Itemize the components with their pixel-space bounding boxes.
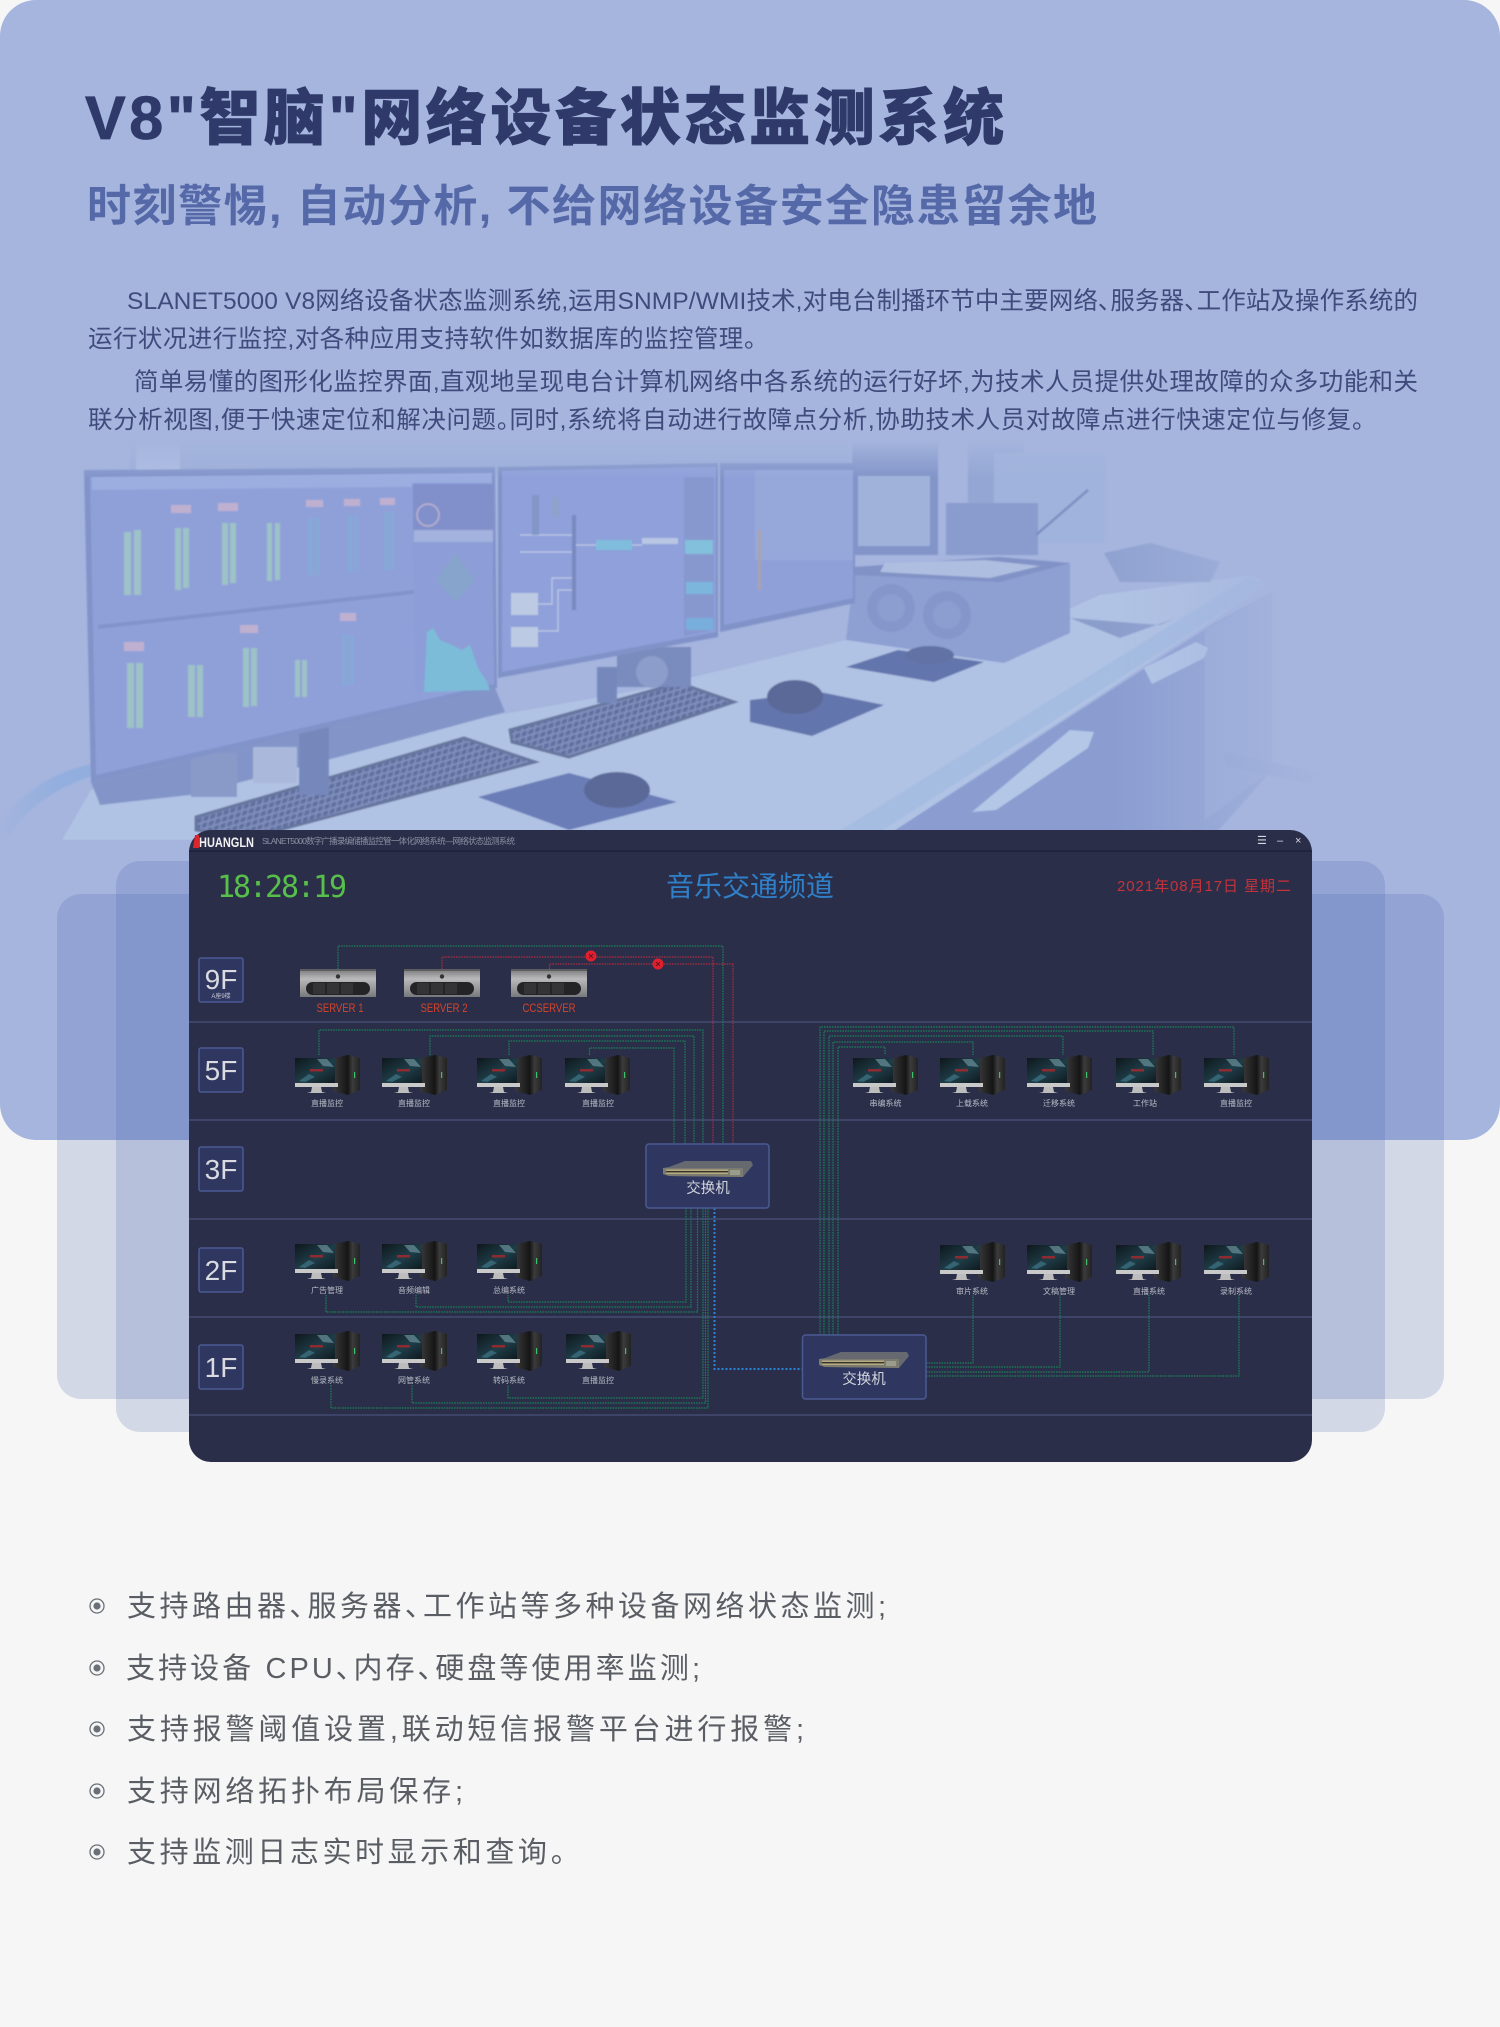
floor label 1F (199, 1345, 243, 1389)
floor label 5F (199, 1048, 243, 1092)
workstations 1F (295, 1331, 631, 1385)
floor label 9F (199, 958, 243, 1002)
window title bar: ☰ (1257, 835, 1267, 847)
window background (189, 830, 1312, 1462)
blue curved desk edge (24, 764, 91, 812)
mouse pads and mice (478, 618, 1176, 830)
workstations 5F right: 迁移系统 (1043, 1098, 1075, 1108)
floor label 2F (199, 1248, 243, 1292)
list item 2: 支持设备 CPU、内存、硬盘等使用率监测; (126, 1652, 700, 1685)
date: 2021年08月17日 星期二 (1117, 878, 1291, 895)
list item 3: 支持报警阈值设置,联动短信报警平台进行报警; (127, 1713, 804, 1746)
workstations 5F left: 直播监控 (398, 1098, 430, 1108)
workstations 2F left: 音频编辑 (398, 1285, 430, 1295)
floor label 9F: 9F (205, 964, 237, 995)
floor label 9F: A座9楼 (211, 992, 231, 1000)
workstations 5F right: 工作站 (1133, 1098, 1157, 1108)
subtitle: 时刻警惕, 自动分析, 不给网络设备安全隐患留余地 (87, 182, 1097, 231)
workstations 1F: 慢录系统 (311, 1375, 343, 1385)
background photo: control room desk with monitors (24, 448, 1259, 840)
list item 5: 支持监测日志实时显示和查询。 (127, 1836, 565, 1869)
back layer: inner translucent plate (116, 861, 1385, 1432)
intro text block (88, 287, 1418, 434)
rear monitors and microphone (852, 440, 1220, 582)
monitor 3 (720, 463, 855, 632)
server: CCSERVER (511, 969, 587, 1015)
monitor 2 (498, 463, 718, 678)
workstations 2F right: 审片系统 (956, 1286, 988, 1296)
intro text block: 简单易懂的图形化监控界面,直观地呈现电台计算机网络中各系统的运行好坏,为技术人员提供处理故障的众多功能和关 (134, 368, 1418, 396)
intro text block: 运行状况进行监控,对各种应用支持软件如数据库的监控管理。 (88, 325, 756, 353)
alarm marker: ccserver link (652, 958, 664, 970)
workstations 5F right: 直播监控 (1220, 1098, 1252, 1108)
switch on 1F: 交换机 (842, 1370, 886, 1388)
speaker, cans and monitor stands (191, 647, 691, 797)
list item 4: 支持网络拓扑布局保存; (127, 1775, 463, 1808)
alarm marker: server 2 link (586, 950, 596, 962)
server: SERVER 2 (404, 969, 480, 1015)
switch on 1F (802, 1335, 926, 1399)
workstations 2F right: 录制系统 (1220, 1286, 1252, 1296)
floor label 5F: 5F (205, 1055, 237, 1086)
keyboards (196, 683, 734, 838)
workstations 2F left (295, 1241, 542, 1295)
wall and window behind monitors (968, 458, 994, 503)
dark area below monitor 1 (91, 688, 505, 805)
workstations 1F: 网管系统 (398, 1375, 430, 1385)
server: SERVER 1: SERVER 1 (316, 1001, 364, 1015)
window title bar (189, 834, 1312, 851)
workstations 5F left (295, 1055, 630, 1108)
floor label 3F: 3F (205, 1154, 237, 1185)
cabinet under desk (844, 614, 1259, 830)
floor label 3F (199, 1147, 243, 1191)
panel: network monitoring software window (189, 830, 1312, 1462)
title: V8"智脑"网络设备状态监测系统 (85, 84, 1004, 152)
row 2 meters (124, 613, 356, 728)
workstations 5F left: 直播监控 (493, 1098, 525, 1108)
window title bar: SLANET5000数字广播录编储播监控管一体化网络系统—网络状态监测系统 (262, 836, 515, 846)
floor label 2F: 2F (205, 1255, 237, 1286)
network connection lines (319, 946, 1239, 1408)
desk surface (62, 575, 1268, 840)
workstations 1F: 直播监控 (582, 1375, 614, 1385)
feature list (90, 1590, 886, 1869)
channel name: 音乐交通频道 (666, 871, 834, 902)
floor label 1F: 1F (205, 1352, 237, 1383)
intro text block: 联分析视图,便于快速定位和解决问题。同时,系统将自动进行故障点分析,协助技术人员对故障点进行快速定位与修复。 (88, 406, 1364, 434)
workstations 5F left: 直播监控 (582, 1098, 614, 1108)
workstations 2F left: 总编系统 (493, 1285, 525, 1295)
workstations 2F right: 文稿管理 (1043, 1286, 1075, 1296)
floor divider lines (189, 1022, 1312, 1415)
server: CCSERVER: CCSERVER (522, 1001, 576, 1015)
server: SERVER 1 (300, 969, 376, 1015)
workstations 2F right (940, 1242, 1269, 1296)
monitor 1 with audio level meters (84, 467, 497, 782)
window title bar: HUANGLN (199, 834, 254, 850)
workstations 5F right (853, 1055, 1269, 1108)
workstations 5F right: 串编系统 (870, 1098, 902, 1108)
intro text block: SLANET5000 V8网络设备状态监测系统,运用SNMP/WMI技术,对电台制播环节中主要网络、服务器、工作站及操作系统的 (127, 287, 1418, 315)
big device box with speakers (846, 557, 1070, 663)
list item 1: 支持路由器、服务器、工作站等多种设备网络状态监测; (127, 1590, 886, 1623)
switch on 3F: 交换机 (686, 1179, 730, 1197)
workstations 5F left: 直播监控 (311, 1098, 343, 1108)
digital clock: 18:28:19 (217, 870, 347, 905)
workstations 1F: 转码系统 (493, 1375, 525, 1385)
window title bar: × (1295, 835, 1301, 847)
server: SERVER 2: SERVER 2 (420, 1001, 468, 1015)
window title bar: – (1277, 835, 1284, 847)
back layer: outer translucent plate (57, 894, 1444, 1399)
workstations 5F right: 上载系统 (956, 1098, 988, 1108)
workstations 2F right: 直播系统 (1133, 1286, 1165, 1296)
switch on 3F (646, 1144, 769, 1208)
workstations 2F left: 广告管理 (311, 1285, 343, 1295)
top blue panel (0, 0, 1500, 1140)
row 1 meters (124, 498, 395, 595)
